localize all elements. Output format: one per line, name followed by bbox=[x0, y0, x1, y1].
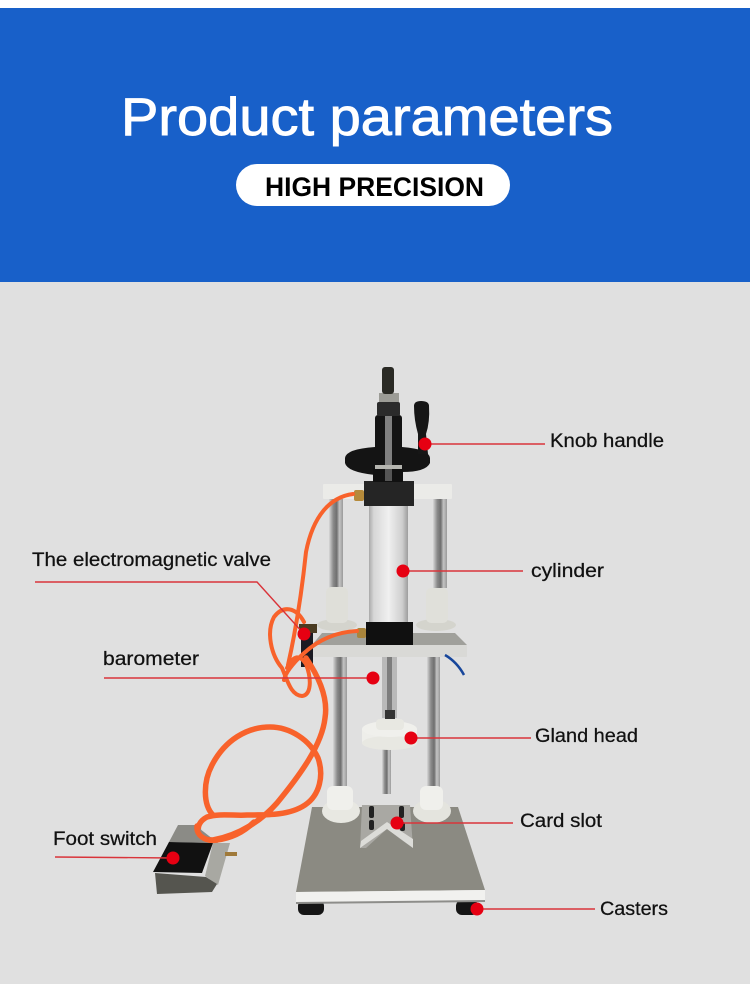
brass fittings bbox=[299, 490, 366, 667]
base plate bbox=[296, 807, 485, 915]
foot switch bbox=[153, 825, 237, 894]
cylinder top block bbox=[364, 481, 414, 506]
callout: knob handle bbox=[418, 431, 664, 452]
top plate bbox=[323, 484, 452, 499]
callout: knob handle: Knob handle bbox=[550, 431, 664, 452]
upper rods bbox=[329, 499, 447, 588]
title: Product parameters bbox=[121, 88, 613, 147]
centre shaft and gland head bbox=[362, 655, 417, 794]
callout: casters: Casters bbox=[600, 899, 668, 920]
callout: card slot: Card slot bbox=[520, 811, 603, 832]
blue tube bbox=[445, 655, 464, 675]
callout: barometer: barometer bbox=[103, 649, 200, 670]
callout: cylinder: cylinder bbox=[531, 561, 605, 582]
machine illustration bbox=[153, 367, 485, 915]
callout: foot switch: Foot switch bbox=[53, 829, 157, 850]
callout: gland head bbox=[404, 726, 638, 747]
callout: gland head: Gland head bbox=[535, 726, 638, 747]
badge: high precision: HIGH PRECISION bbox=[265, 172, 484, 202]
orange air tubes bbox=[198, 494, 357, 840]
callout: foot switch bbox=[53, 829, 180, 864]
callout: casters bbox=[470, 899, 668, 920]
callout: cylinder bbox=[396, 561, 605, 582]
callout: electromagnetic valve: The electromagnetic valve bbox=[32, 550, 271, 571]
knob bbox=[345, 367, 430, 482]
callout: electromagnetic valve bbox=[32, 550, 310, 640]
upper collars bbox=[317, 587, 456, 631]
callout: barometer bbox=[103, 649, 380, 684]
lower collars bbox=[322, 786, 451, 823]
header band bbox=[0, 0, 750, 282]
cylinder bottom block bbox=[366, 622, 413, 645]
cylinder bbox=[369, 504, 408, 624]
callout: card slot bbox=[390, 811, 603, 832]
middle plate bbox=[312, 633, 467, 657]
card slot bbox=[360, 805, 413, 848]
lower rods bbox=[333, 655, 440, 787]
badge: high precision bbox=[236, 164, 510, 206]
retouched tube loop over foot switch bbox=[197, 822, 254, 840]
